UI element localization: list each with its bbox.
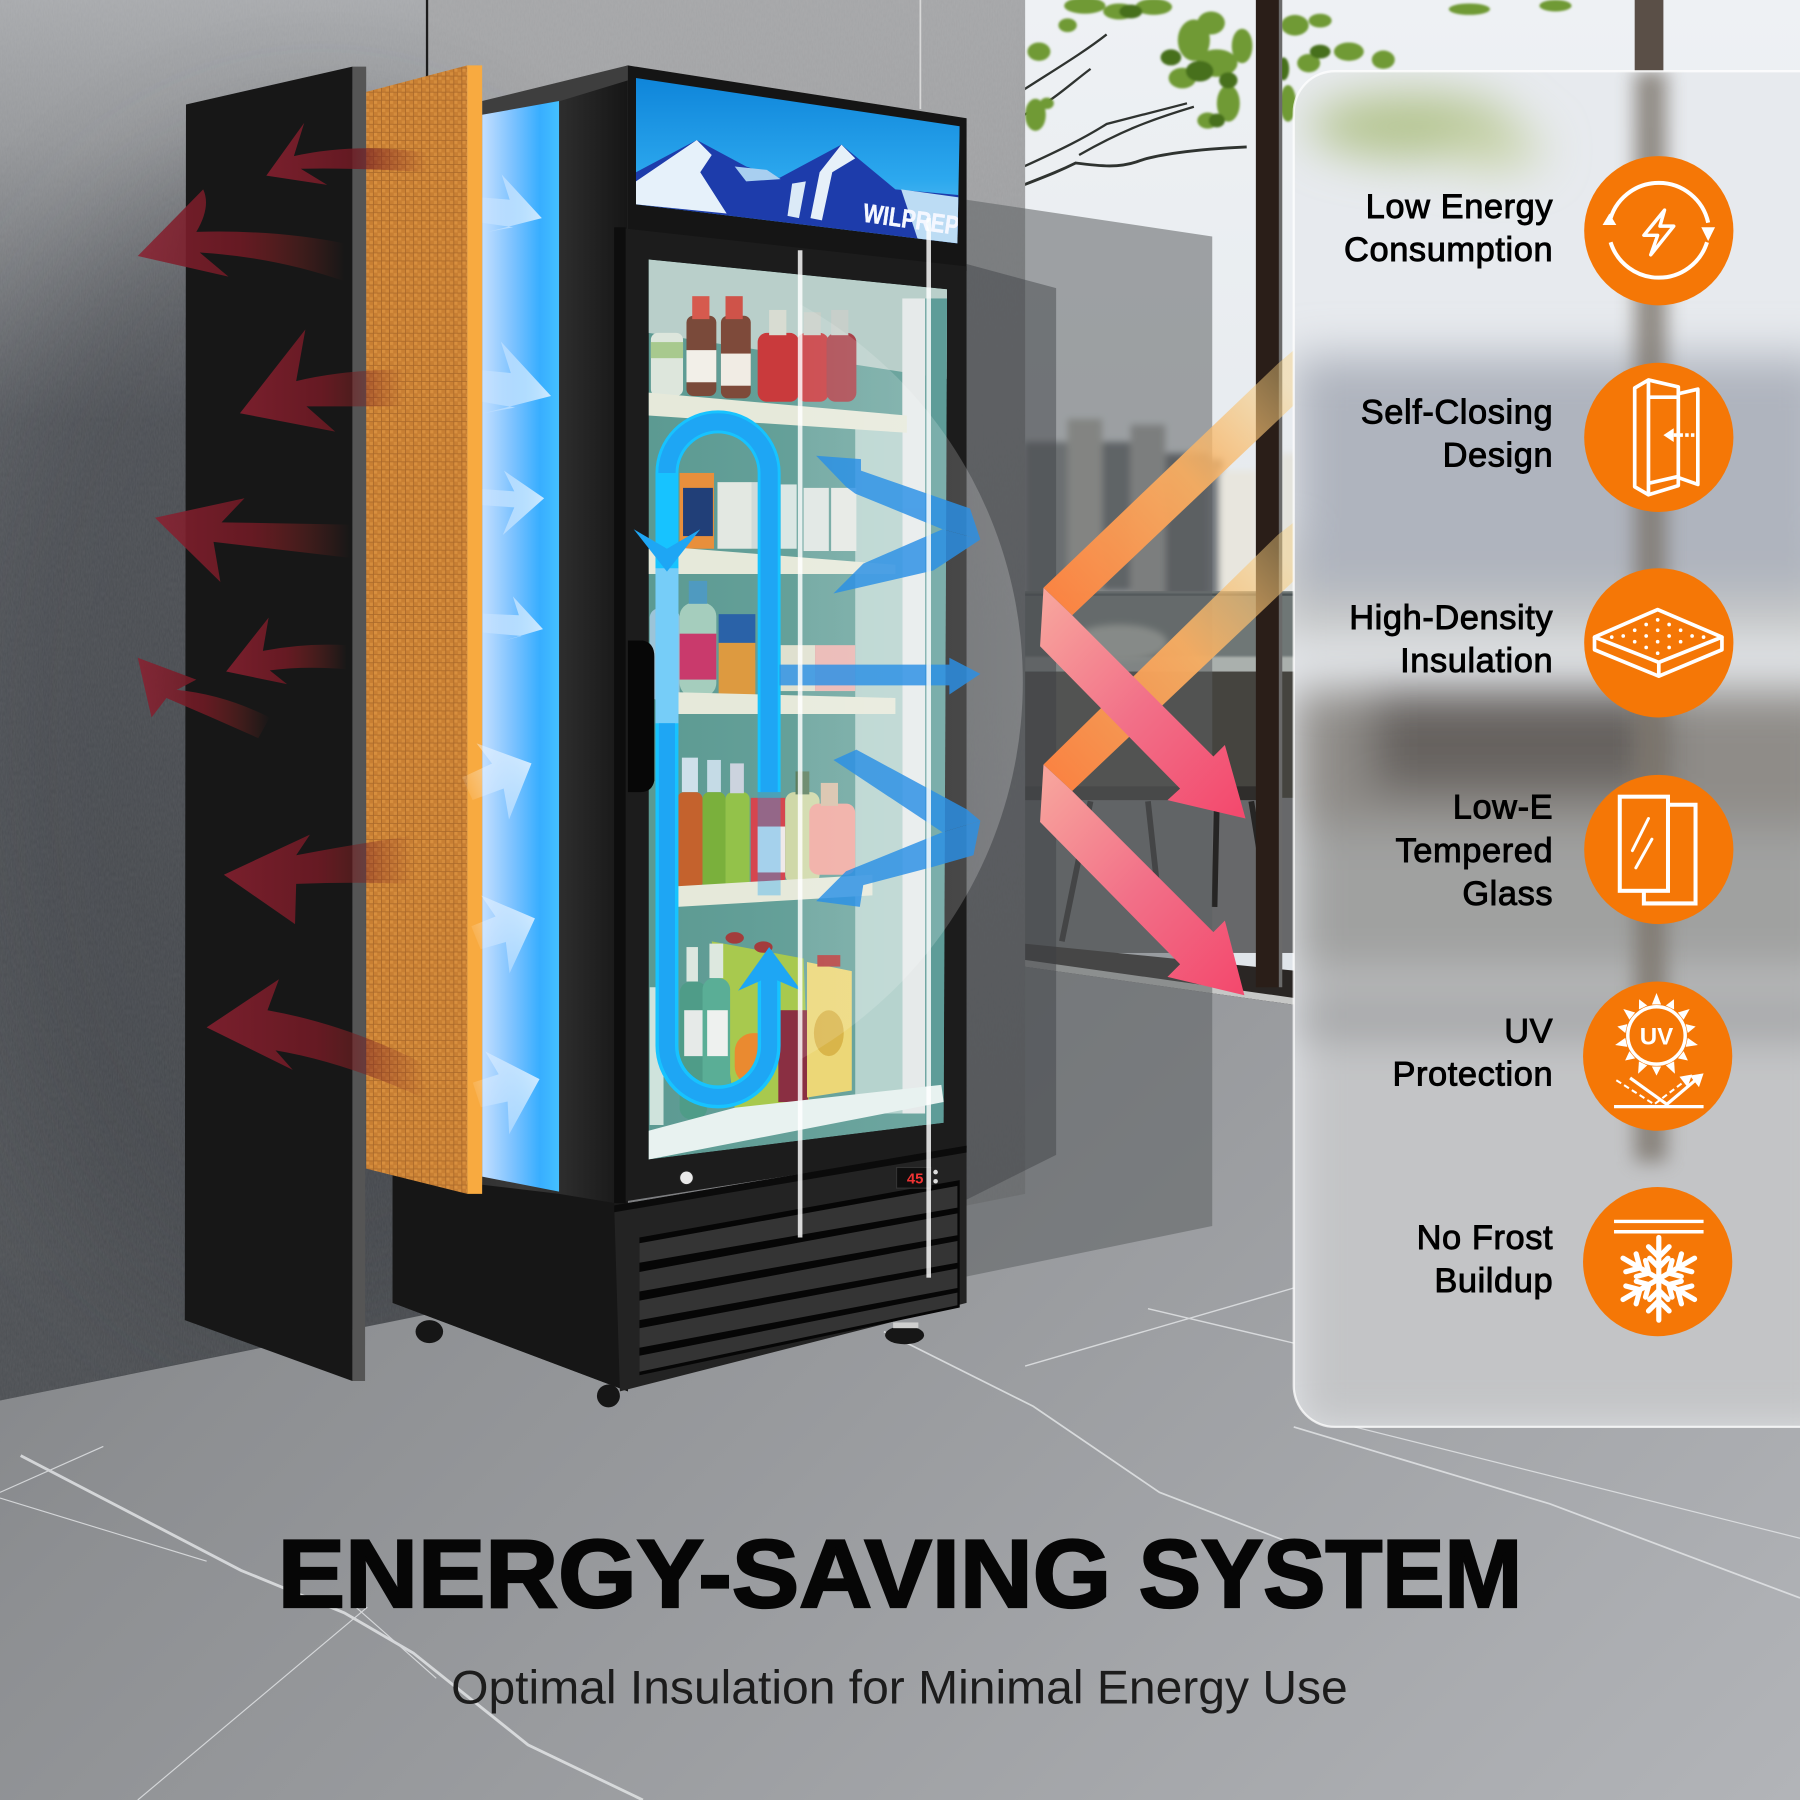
- temperature display: 45: [907, 1171, 923, 1188]
- mountain sign screen: [636, 78, 960, 244]
- outer black panel: [185, 67, 366, 1381]
- label: No Frost: [1417, 1219, 1553, 1257]
- feature: low energy consumption: [1344, 156, 1733, 305]
- heat flow arrows: orange and pink ribbons: [1040, 350, 1294, 995]
- cabinet base left: [393, 1173, 628, 1391]
- label: [1392, 1012, 1553, 1093]
- pink arrow lower: [1040, 765, 1244, 995]
- feature: uv protection: [1392, 982, 1732, 1131]
- feature: self-closing design: [1361, 363, 1733, 512]
- row 3 bottles: [650, 581, 855, 700]
- label: [1417, 1219, 1553, 1300]
- orange ribbon upper: [1043, 350, 1294, 615]
- label: Low Energy: [1366, 188, 1553, 226]
- brand name: WILPREP: [861, 198, 961, 241]
- blue cold-air circulation loop: [634, 422, 801, 1097]
- tree leaves: [1025, 0, 1572, 131]
- row 5 bottles and cartons: [650, 932, 852, 1125]
- label: [1344, 188, 1553, 269]
- label: Glass: [1462, 875, 1553, 913]
- base with louvres: [614, 1146, 967, 1391]
- glass and contents: [649, 259, 947, 1159]
- label: Design: [1443, 437, 1553, 475]
- white cold arrows on blue panel: [452, 174, 553, 1140]
- red heat arrows: [138, 123, 427, 1100]
- title: ENERGY-SAVING: [278, 1521, 1111, 1628]
- arrowhead down: [634, 529, 700, 572]
- tree branches: [1024, 34, 1247, 185]
- pink arrow upper: [1040, 588, 1246, 818]
- label: Insulation: [1400, 642, 1553, 680]
- row 1 bottles: [651, 296, 856, 402]
- shelves: [649, 393, 944, 1159]
- door frame: [614, 227, 967, 1203]
- orange insulation panel: [366, 65, 482, 1194]
- label: [1349, 599, 1553, 680]
- subtitle: Optimal Insulation for Minimal Energy Use: [451, 1661, 1348, 1714]
- blue air arrows through glass: [779, 456, 980, 907]
- label: [1361, 394, 1553, 475]
- refrigerator cabinet: [393, 65, 967, 1407]
- frosted features panel: [1274, 71, 1800, 1435]
- window view: [1024, 0, 1800, 1039]
- feature: no frost buildup: [1417, 1187, 1732, 1336]
- icon: insulation slab: [1584, 568, 1733, 717]
- row 4 bottles: [677, 758, 855, 890]
- temperature display: [897, 1167, 938, 1188]
- window mullions: [1256, 0, 1663, 987]
- label: High-Density: [1349, 599, 1553, 637]
- orange ribbon lower: [1043, 522, 1294, 791]
- cabinet side: [393, 65, 628, 1391]
- feature: low-e tempered glass: [1396, 775, 1733, 924]
- label: [1396, 788, 1553, 913]
- row 2 cans: [680, 473, 856, 551]
- feature: high-density insulation: [1349, 568, 1733, 717]
- label: Low-E: [1453, 788, 1553, 826]
- translucent plane shadows behind the door: [967, 200, 1212, 1277]
- door lock: [680, 1171, 693, 1185]
- label: Consumption: [1344, 231, 1553, 269]
- arrowhead up: [738, 947, 801, 991]
- door handle: [628, 641, 654, 792]
- label: Buildup: [1434, 1262, 1553, 1300]
- icon: uv sun: [1583, 982, 1732, 1131]
- casters: [416, 1320, 924, 1407]
- icon: uv sun: UV: [1640, 1024, 1673, 1051]
- header sign frame: [628, 65, 967, 271]
- title: SYSTEM: [1139, 1521, 1522, 1628]
- label: Protection: [1392, 1055, 1553, 1093]
- title: [278, 1521, 1522, 1628]
- door reflection lines: [798, 218, 931, 1278]
- icon: glass panes: [1584, 775, 1733, 924]
- icon: energy cycle: [1584, 156, 1733, 305]
- label: Self-Closing: [1361, 394, 1553, 432]
- light veil circle over door: [160, 250, 1023, 1114]
- floor veins: [0, 1288, 1800, 1800]
- wall: [0, 0, 1025, 1401]
- blue inner liner panel: [482, 101, 559, 1192]
- icon: snowflake: [1583, 1187, 1732, 1336]
- icon: door: [1584, 363, 1733, 512]
- label: Tempered: [1396, 832, 1553, 870]
- label: UV: [1504, 1012, 1553, 1050]
